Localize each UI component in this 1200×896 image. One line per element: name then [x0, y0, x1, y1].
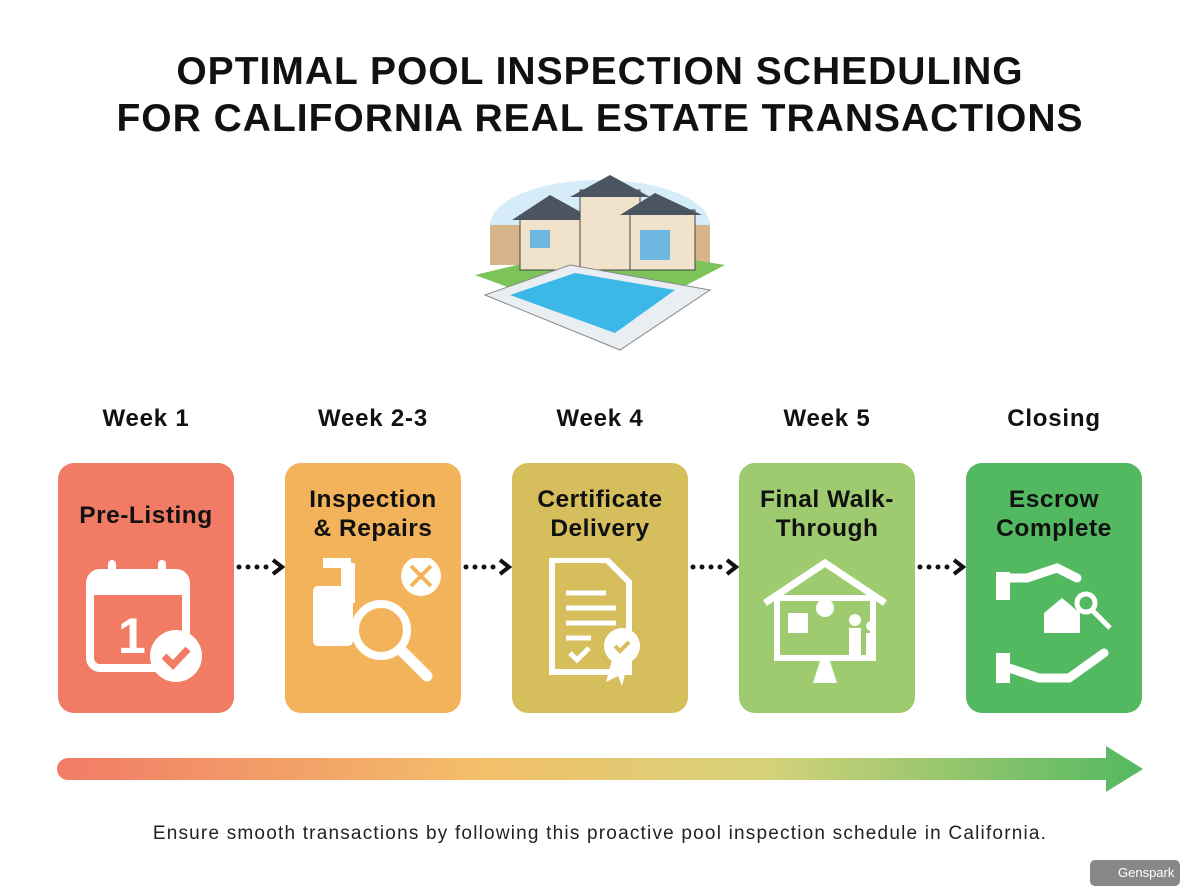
- icon: hands with keys: [996, 563, 1112, 683]
- footer text: Ensure smooth transactions by following this proactive pool inspection schedule in California.: [153, 823, 1047, 844]
- card: final walk-through: [739, 463, 915, 713]
- title: OPTIMAL POOL INSPECTION SCHEDULING: [176, 50, 1024, 93]
- card: inspection & repairs: Inspection: [309, 486, 437, 513]
- card: inspection & repairs: [285, 463, 461, 713]
- icon: calendar: [86, 560, 202, 682]
- badge: Genspark: Genspark: [1118, 865, 1174, 880]
- text: Week 2-3: [318, 405, 428, 432]
- card: escrow complete: Complete: [996, 515, 1112, 542]
- icon: calendar: 1: [118, 608, 146, 664]
- card: certificate delivery: Certificate: [537, 486, 663, 513]
- illustration: house with pool: [475, 175, 725, 351]
- text: Closing: [1007, 405, 1101, 432]
- icon: certificate: [549, 558, 640, 686]
- card: inspection & repairs: & Repairs: [314, 515, 432, 542]
- icon: magnifier pump: [313, 558, 441, 682]
- card: escrow complete: [966, 463, 1142, 713]
- card: final walk-through: Through: [776, 515, 878, 542]
- title: [116, 50, 1084, 140]
- card: certificate delivery: Delivery: [550, 515, 650, 542]
- text: Week 5: [783, 405, 871, 432]
- arrow: [690, 558, 739, 576]
- card: pre-listing: Pre-Listing: [79, 502, 213, 529]
- badge: Genspark: [1090, 860, 1180, 886]
- arrow: [918, 558, 966, 576]
- week labels: Week 1: [102, 405, 190, 432]
- icon: house with family: [763, 558, 887, 683]
- card: escrow complete: Escrow: [1009, 486, 1099, 513]
- title: FOR CALIFORNIA REAL ESTATE TRANSACTIONS: [116, 97, 1084, 140]
- card: pre-listing: [58, 463, 234, 713]
- arrow: [464, 558, 512, 576]
- card: certificate delivery: [512, 463, 688, 713]
- timeline arrow: [57, 746, 1143, 792]
- arrow: [236, 558, 285, 576]
- card: final walk-through: Final Walk-: [760, 486, 894, 513]
- text: Week 4: [556, 405, 644, 432]
